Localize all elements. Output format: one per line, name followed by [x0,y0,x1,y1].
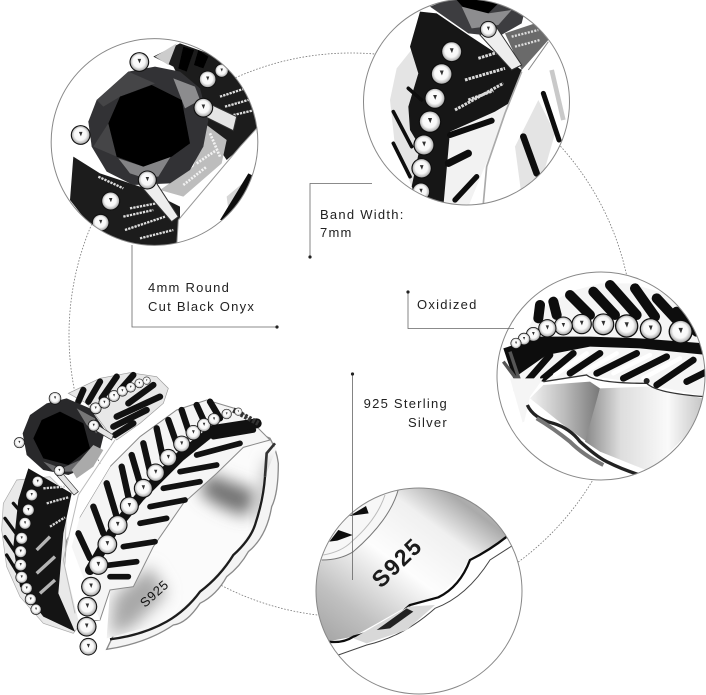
callout: stone [132,245,279,329]
callout: band width: Band Width: [320,207,405,222]
stamp text S925: S925 [366,532,427,593]
white diagonal band [65,440,117,620]
panel: onyx stone close-up [51,39,260,248]
top feather beads [90,402,102,414]
white band edge [177,128,260,248]
prongs [92,423,113,440]
stone [88,67,208,185]
dark spine [503,337,706,378]
dotted connector circle [69,53,633,617]
silver seat below stone [160,125,227,197]
feather body [510,283,706,397]
right feather beads [80,638,97,655]
dark feather spine [408,12,522,207]
prong [480,25,522,70]
polished band [316,488,507,641]
main ring photo [2,373,278,655]
white blob right of spine [444,104,508,204]
lower rim [527,405,640,475]
callout: sterling silver: 925 Sterling [364,396,448,411]
silver seat [72,445,103,478]
feather tip [322,491,397,560]
top feather [68,373,168,440]
dark spine [90,423,257,570]
stone [23,398,105,475]
band outer rim [107,428,278,649]
callout: oxidized [406,290,514,328]
callout: band width: 7mm [320,225,353,240]
white body left [355,0,428,207]
lower barbs [527,353,706,385]
callout: sterling silver [351,372,448,580]
panel: S925 stamp close-up [312,485,523,694]
ring stamp S925: S925 [137,577,172,610]
panel: oxidized finish close-up [490,272,706,482]
callout: stone: Cut Black Onyx [148,299,255,314]
callout: sterling silver: Silver [408,415,448,430]
left feather beads [32,476,44,488]
inner shadow under feather [200,473,257,517]
right rim shading [257,460,277,520]
lower band shading [110,567,167,637]
scalloped edge [543,375,705,397]
callout: stone: 4mm Round [148,280,230,295]
right feather [63,400,270,623]
prongs [206,105,237,131]
beads [669,320,693,344]
wavy rim [328,537,507,642]
white band [503,40,548,122]
beads [441,41,462,62]
ring band inner [107,428,277,638]
panel: prong and feather close-up [355,0,575,207]
gem top [430,0,528,37]
left feather body [2,477,83,633]
callout: band width [308,184,405,259]
inside of band [530,382,600,442]
callout: oxidized: Oxidized [417,297,478,312]
feather metal behind stone [153,43,257,160]
